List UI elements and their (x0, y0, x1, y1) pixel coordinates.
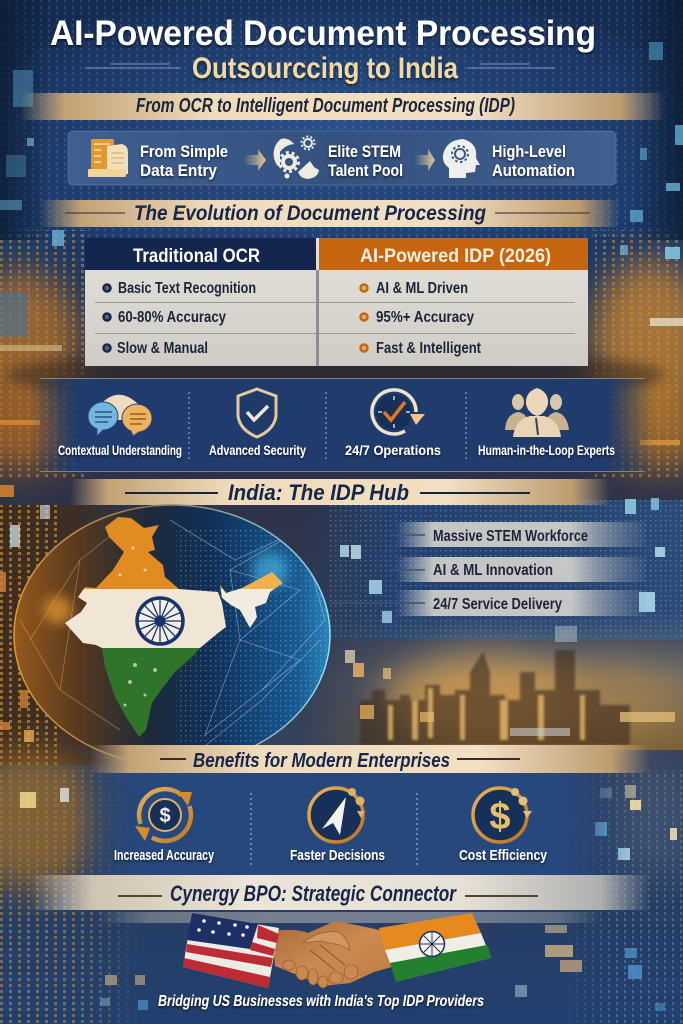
right column: AI-powered IDP: AI-Powered IDP (2026) (360, 246, 551, 267)
heading: India hub (70, 479, 610, 505)
icon: cost efficiency: $ (489, 796, 511, 838)
icon: clock (372, 390, 425, 434)
list: India strengths (330, 522, 646, 616)
handshake illustration (183, 913, 492, 988)
tagline: Bridging US Businesses with India's Top IDP Providers (158, 993, 484, 1010)
right column: AI-powered IDP: AI & ML Driven (376, 280, 468, 297)
subtitle (85, 52, 555, 85)
heading: benefits (90, 745, 650, 773)
label: Contextual Understanding (58, 442, 182, 458)
icon: faster decisions (309, 788, 365, 842)
right column: AI-powered IDP (360, 246, 551, 357)
banner: from OCR to IDP: From OCR to Intelligent Document Processing (IDP) (136, 95, 515, 117)
left column: traditional OCR: 60-80% Accuracy (118, 309, 226, 326)
step text: high-level automation: High-Level (492, 142, 566, 161)
label: Increased Accuracy (114, 847, 214, 864)
Ashoka Chakra (137, 598, 183, 644)
panel: progression (68, 131, 616, 185)
icon: head with gear (443, 139, 480, 178)
heading: India hub: India: The IDP Hub (228, 480, 409, 505)
step text: high-level automation: Automation (492, 161, 575, 180)
heading: evolution: The Evolution of Document Processing (134, 202, 486, 225)
heading: benefits: Benefits for Modern Enterprises (193, 750, 450, 772)
step text: from simple data entry (140, 142, 228, 180)
heading: Cynergy BPO: Cynergy BPO: Strategic Connector (170, 881, 457, 906)
icon: cost efficiency (473, 788, 532, 842)
icon: conversation bubbles (88, 395, 152, 436)
banner: from OCR to IDP (20, 93, 665, 120)
right column: AI-powered IDP: 95%+ Accuracy (376, 309, 474, 326)
label: Faster Decisions (290, 847, 385, 864)
title: AI-Powered Document Processing (50, 14, 596, 53)
step text: from simple data entry: From Simple (140, 142, 228, 161)
left column: traditional OCR: Slow & Manual (117, 340, 208, 357)
arrow (415, 149, 435, 171)
icon: increased accuracy (135, 789, 192, 841)
label: 24/7 Operations (345, 442, 441, 458)
globe (14, 505, 330, 765)
step text: elite STEM talent pool (328, 142, 403, 180)
India map with flag colours (65, 517, 283, 737)
list: India strengths: Massive STEM Workforce (433, 528, 588, 545)
left column: traditional OCR: Traditional OCR (133, 246, 260, 267)
subtitle: Outsourccing to India (192, 52, 458, 85)
India flag (379, 913, 492, 982)
step text: from simple data entry: Data Entry (140, 161, 217, 180)
comparison table (85, 238, 588, 366)
label: Advanced Security (209, 442, 306, 458)
icon: gears and hand (274, 136, 319, 179)
step text: high-level automation (492, 142, 575, 180)
icon: documents (88, 139, 128, 177)
label: Cost Efficiency (459, 847, 548, 864)
city skyline (360, 650, 675, 745)
panel: benefits (70, 773, 630, 875)
step text: elite STEM talent pool: Elite STEM (328, 142, 401, 161)
panel: capabilities (30, 378, 655, 472)
arrow (244, 149, 266, 171)
band behind flags (100, 912, 600, 923)
hands (272, 921, 392, 988)
icon: increased accuracy: $ (159, 805, 171, 827)
label: Human-in-the-Loop Experts (478, 442, 615, 458)
step text: elite STEM talent pool: Talent Pool (328, 161, 403, 180)
left column: traditional OCR (104, 246, 260, 357)
left column: traditional OCR: Basic Text Recognition (118, 280, 256, 297)
right column: AI-powered IDP: Fast & Intelligent (376, 340, 482, 357)
US flag (183, 913, 279, 988)
list: India strengths: AI & ML Innovation (433, 562, 553, 579)
heading: Cynergy BPO (30, 875, 650, 910)
icon: security shield (238, 389, 276, 437)
icon: experts (505, 388, 569, 437)
heading: evolution (40, 200, 620, 227)
list: India strengths: 24/7 Service Delivery (433, 596, 562, 613)
